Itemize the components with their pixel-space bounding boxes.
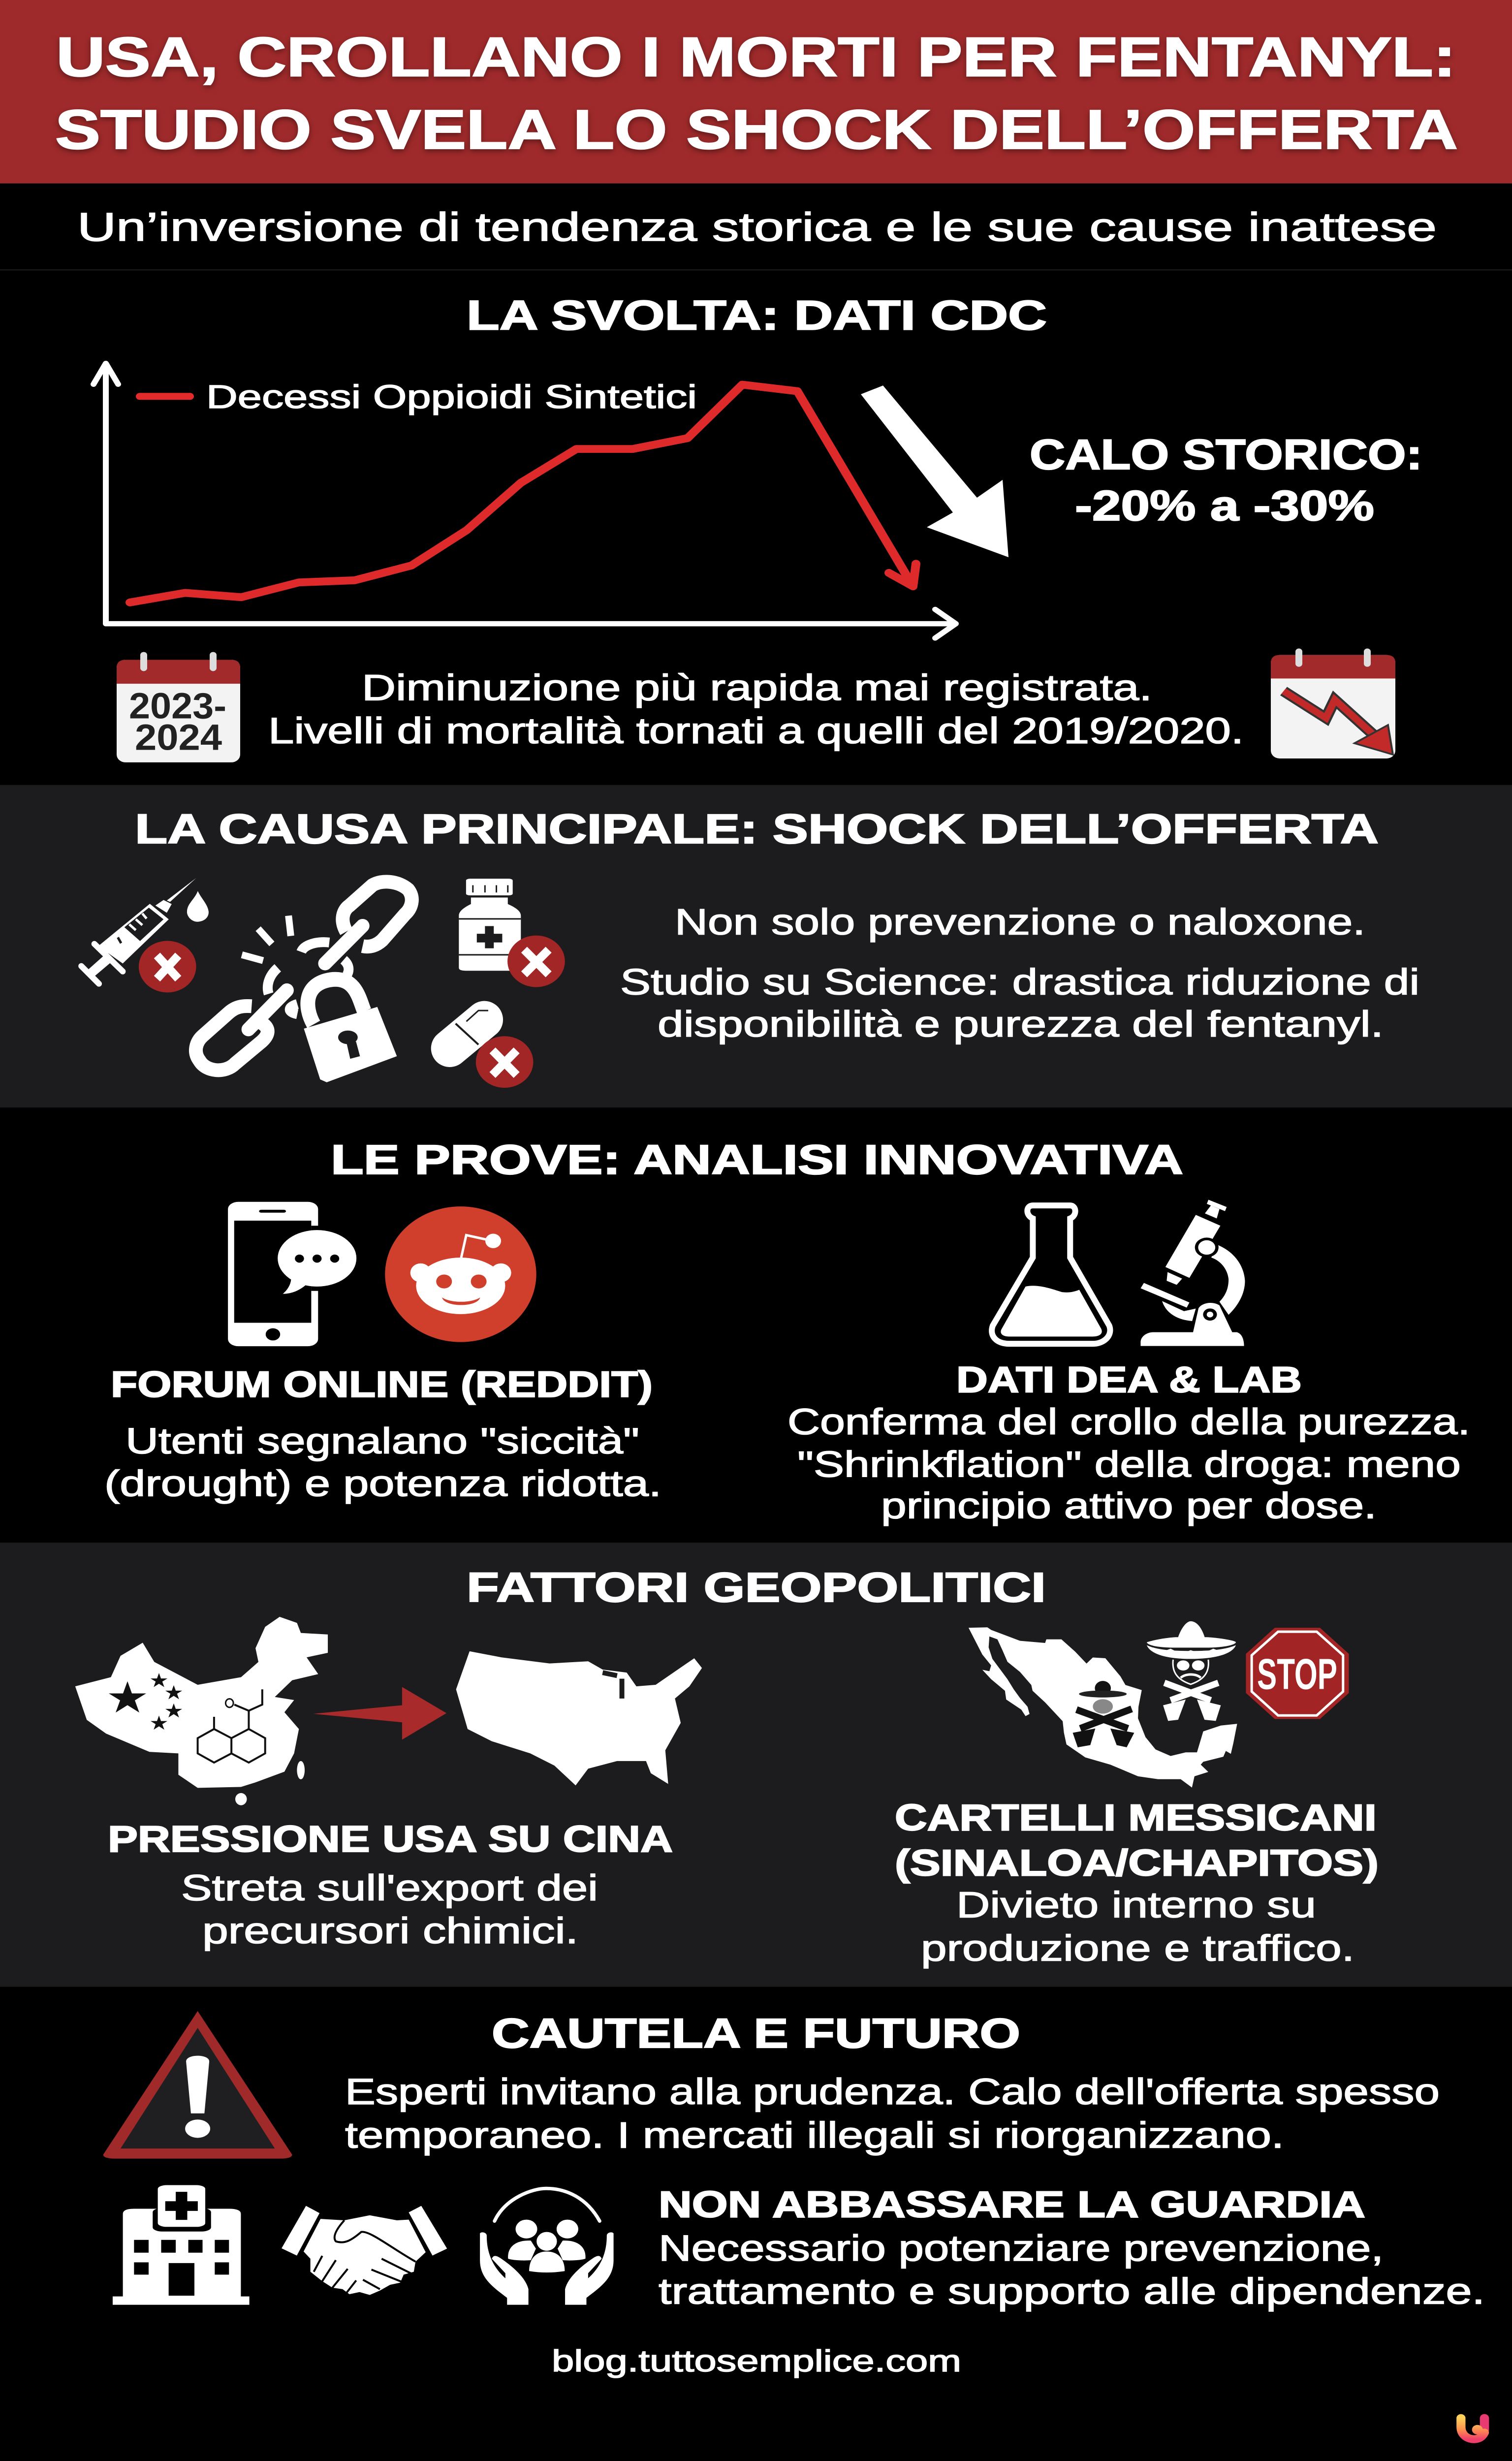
text: non solo prevenzione: disponibilità e purezza del fentanyl.	[658, 1004, 1384, 1044]
text: non solo prevenzione: Non solo prevenzione o naloxone.	[675, 901, 1365, 943]
title: USA, CROLLANO I MORTI PER FENTANYL:	[56, 26, 1456, 88]
text block: cartelli messicani	[895, 1797, 1379, 1968]
icon: handshake	[282, 2206, 447, 2295]
arrow: china to usa	[314, 1687, 446, 1739]
text block: pressione usa su cina	[108, 1818, 673, 1951]
icon: pill	[450, 1010, 533, 1088]
icon: phone with speech bubble	[228, 1202, 356, 1346]
icon: padlock	[304, 979, 397, 1082]
icon: reddit logo	[385, 1206, 536, 1342]
text block: cartelli messicani: Divieto interno su	[956, 1884, 1316, 1925]
text: diminuzione: Diminuzione più rapida mai registrata.	[362, 667, 1152, 708]
heading: LA SVOLTA: DATI CDC	[467, 292, 1047, 339]
icon: warning triangle	[103, 2011, 292, 2159]
callout: calo storico: CALO STORICO:	[1030, 430, 1422, 478]
big white down arrow	[861, 385, 1008, 557]
text block: non abbassare la guardia: NON ABBASSARE LA GUARDIA	[659, 2183, 1365, 2225]
icon: calendar with falling arrow	[1271, 649, 1395, 758]
text block: forum online: FORUM ONLINE (REDDIT)	[111, 1364, 653, 1405]
title	[55, 26, 1458, 160]
text block: non abbassare la guardia	[659, 2183, 1485, 2311]
icon: logo	[1461, 2418, 1484, 2439]
icon: hands protecting people	[480, 2188, 614, 2305]
heading: LA CAUSA PRINCIPALE: SHOCK DELL’OFFERTA	[135, 806, 1379, 852]
text block: pressione usa su cina: precursori chimici.	[202, 1910, 578, 1951]
panel: fattori geopolitici	[0, 1543, 1512, 1987]
icon: stop sign: STOP	[1257, 1650, 1337, 1698]
text block: esperti: temporaneo. I mercati illegali si riorganizzano.	[345, 2114, 1284, 2155]
heading: LE PROVE: ANALISI INNOVATIVA	[331, 1136, 1183, 1183]
icon: calendar 2023-2024: 2024	[135, 717, 222, 757]
map: china	[75, 1617, 328, 1805]
red data line	[130, 385, 916, 602]
text: non solo prevenzione	[620, 901, 1419, 1044]
callout: calo storico	[1030, 430, 1422, 530]
panel: cautela e futuro	[103, 2010, 1485, 2311]
text: diminuzione: Livelli di mortalità tornati a quelli del 2019/2020.	[268, 710, 1244, 751]
icon: broken chain	[196, 882, 412, 1070]
map: usa	[456, 1651, 702, 1785]
text block: dati dea e lab: Conferma del crollo della purezza.	[788, 1401, 1470, 1442]
text block: forum online: Utenti segnalano "siccità"	[126, 1420, 639, 1461]
icon: flask	[992, 1205, 1110, 1344]
text block: pressione usa su cina: PRESSIONE USA SU CINA	[108, 1818, 673, 1860]
icon: sombrero skull and crossed pistols	[1147, 1621, 1236, 1721]
icon: medicine bottle	[459, 879, 565, 987]
icon: stop sign	[1246, 1628, 1349, 1719]
line chart	[94, 363, 956, 638]
icon: syringe	[81, 878, 209, 992]
text block: esperti	[345, 2071, 1440, 2155]
text block: forum online	[104, 1364, 662, 1504]
text block: cartelli messicani: produzione e traffico.	[921, 1927, 1354, 1968]
heading: FATTORI GEOPOLITICI	[467, 1564, 1046, 1611]
text block: non abbassare la guardia: Necessario potenziare prevenzione,	[659, 2228, 1384, 2269]
text block: esperti: Esperti invitano alla prudenza. Calo dell'offerta spesso	[345, 2071, 1440, 2112]
text block: pressione usa su cina: Streta sull'export dei	[181, 1867, 598, 1908]
text block: cartelli messicani: (SINALOA/CHAPITOS)	[895, 1842, 1379, 1883]
icon: calendar 2023-2024: 2023-	[129, 685, 226, 726]
text: non solo prevenzione: Studio su Science: drastica riduzione di	[620, 961, 1419, 1002]
text block: non abbassare la guardia: trattamento e supporto alle dipendenze.	[659, 2271, 1485, 2311]
axes	[94, 363, 956, 638]
icons cluster	[81, 878, 565, 1088]
panel: la causa principale	[0, 785, 1512, 1107]
panel: la svolta, dati CDC	[94, 292, 1422, 762]
text block: dati dea e lab: "Shrinkflation" della droga: meno	[797, 1444, 1461, 1485]
icon: hospital	[113, 2185, 250, 2305]
icon: microscope	[1140, 1202, 1245, 1346]
title: STUDIO SVELA LO SHOCK DELL’OFFERTA	[55, 98, 1458, 160]
text: diminuzione	[268, 667, 1244, 751]
icon: calendar 2023-2024	[117, 652, 240, 762]
text block: dati dea e lab: principio attivo per dose.	[881, 1485, 1377, 1526]
subtitle: Un’inversione di tendenza storica e le sue cause inattese	[77, 205, 1437, 250]
legend: Decessi Oppioidi Sintetici	[206, 379, 697, 415]
map: mexico with cartel emblem	[969, 1627, 1237, 1788]
text block: cartelli messicani: CARTELLI MESSICANI	[895, 1797, 1377, 1838]
heading: CAUTELA E FUTURO	[492, 2010, 1020, 2057]
callout: calo storico: -20% a -30%	[1075, 481, 1374, 530]
panel: le prove	[104, 1136, 1470, 1526]
text block: dati dea e lab: DATI DEA & LAB	[956, 1359, 1302, 1400]
text block: dati dea e lab	[788, 1359, 1470, 1526]
panel: title banner	[0, 0, 1512, 184]
text block: forum online: (drought) e potenza ridotta.	[104, 1463, 662, 1504]
footer: website: blog.tuttosemplice.com	[552, 2344, 961, 2378]
